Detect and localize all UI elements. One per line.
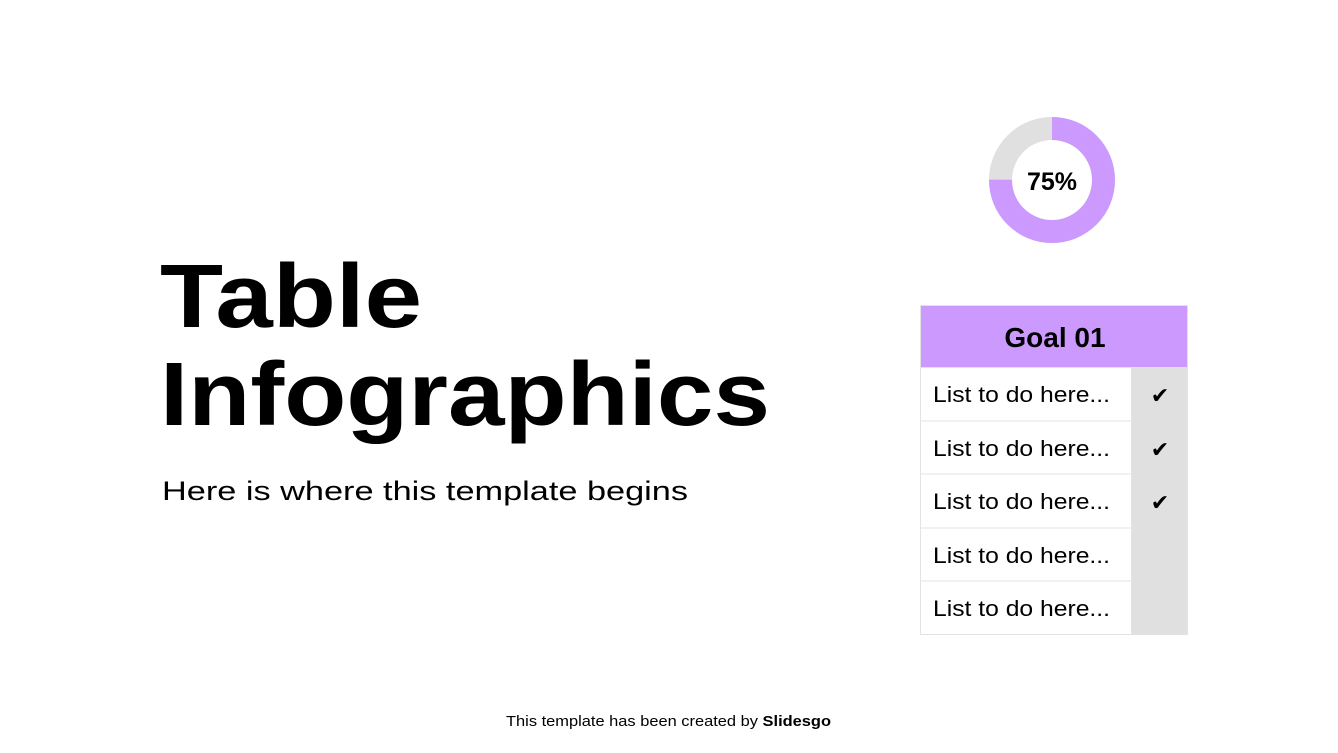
donut chart: 75%: 75% [1027,168,1077,196]
rows: List to do here... [933,596,1110,621]
footer credit: This template has been created by Slidesgo [506,713,831,730]
donut chart: 75% [1000,128,1104,232]
check marks: ✔ [1151,438,1169,463]
table: Goal 01 [920,305,1188,635]
subtitle: Here is where this template begins [162,476,688,506]
check marks: ✔ [1151,491,1169,516]
check column [1132,367,1188,635]
rows: List to do here... [933,382,1110,407]
table header [920,305,1188,367]
rows: List to do here... [933,543,1110,568]
rows: List to do here... [933,489,1110,514]
check marks [1151,384,1169,516]
rows: List to do here... [933,436,1110,461]
check marks: ✔ [1151,384,1169,409]
table header: Goal 01 [1004,322,1106,353]
title: Infographics [160,345,770,445]
title [160,247,770,445]
title: Table [160,247,422,347]
rows [920,306,1188,634]
